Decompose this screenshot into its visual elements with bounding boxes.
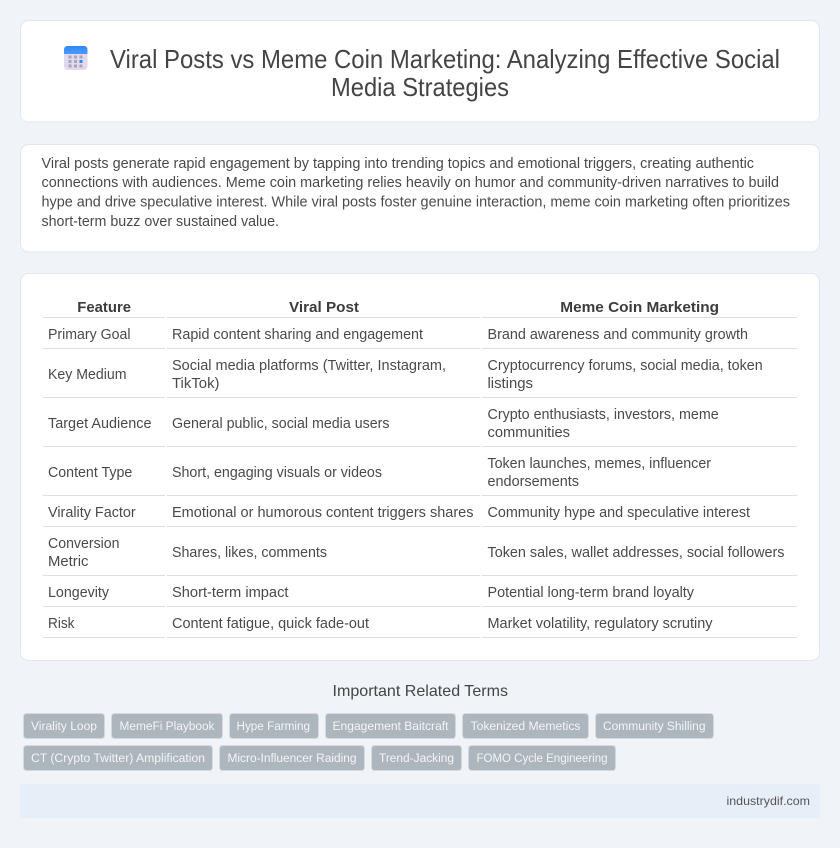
row: conversion metric: Token sales, wallet addresses, social followers: [488, 545, 784, 561]
intro text: hype and drive speculative interest. While viral posts foster genuine interaction, meme coin marketing often prioritizes: [42, 195, 790, 211]
tag: Hype Farming: Hype Farming: [236, 719, 310, 733]
row: virality factor: Emotional or humorous content triggers shares: [172, 505, 474, 521]
tag: Micro-Influencer Raiding: [220, 746, 364, 770]
panel: introduction: [20, 144, 820, 252]
table header: Viral Post: [289, 300, 359, 316]
row: virality factor: Community hype and speculative interest: [488, 505, 750, 521]
row: key medium: TikTok): [172, 376, 220, 392]
tag: CT (Crypto Twitter) Amplification: CT (Crypto Twitter) Amplification: [31, 751, 205, 765]
tag: MemeFi Playbook: MemeFi Playbook: [120, 719, 215, 733]
related term tags: [24, 714, 714, 770]
row: content type: Content Type: [48, 465, 132, 481]
intro text: [42, 156, 790, 230]
row: primary goal: Rapid content sharing and engagement: [172, 327, 423, 343]
row: conversion metric: Shares, likes, comments: [172, 545, 327, 561]
row: longevity: Potential long-term brand loyalty: [488, 585, 695, 601]
tag: Trend-Jacking: Trend-Jacking: [379, 751, 454, 765]
row: primary goal: Brand awareness and community growth: [488, 327, 748, 343]
row: primary goal: Primary Goal: [48, 327, 130, 343]
table grid lines: [43, 317, 797, 638]
table header: Meme Coin Marketing: [560, 300, 719, 316]
tag: MemeFi Playbook: [112, 714, 222, 738]
row: content type: [48, 456, 711, 490]
tag: CT (Crypto Twitter) Amplification: [24, 746, 212, 770]
row: longevity: Longevity: [48, 585, 110, 601]
tag: Virality Loop: [24, 714, 104, 738]
footer: industrydif.com: [726, 794, 810, 808]
heading: related terms: Important Related Terms: [332, 683, 508, 700]
row: content type: Short, engaging visuals or videos: [172, 465, 382, 481]
tag: Engagement Baitcraft: Engagement Baitcraft: [332, 719, 449, 733]
row: conversion metric: [48, 536, 784, 570]
tag: Micro-Influencer Raiding: Micro-Influencer Raiding: [228, 751, 356, 765]
row: key medium: [48, 358, 763, 392]
tag: Community Shilling: [596, 714, 714, 738]
table header: [77, 300, 719, 316]
row: conversion metric: Conversion: [48, 536, 120, 552]
row: longevity: [48, 585, 695, 601]
row: key medium: Key Medium: [48, 367, 127, 383]
row: virality factor: Virality Factor: [48, 505, 136, 521]
row: risk: Risk: [48, 616, 75, 632]
icon: calendar: [64, 46, 88, 70]
row: longevity: Short-term impact: [172, 585, 288, 601]
row: key medium: Social media platforms (Twitter, Instagram,: [172, 358, 446, 374]
panel: header: [20, 20, 820, 122]
tag: FOMO Cycle Engineering: FOMO Cycle Engineering: [476, 751, 608, 765]
row: risk: Content fatigue, quick fade-out: [172, 616, 369, 632]
title: [110, 44, 780, 102]
intro text: Viral posts generate rapid engagement by tapping into trending topics and emotional triggers, creating authentic: [42, 156, 754, 172]
title: Viral Posts vs Meme Coin Marketing: Analyzing Effective Social: [110, 44, 780, 74]
row: content type: endorsements: [488, 474, 579, 490]
row: target audience: General public, social media users: [172, 416, 390, 432]
row: risk: Market volatility, regulatory scrutiny: [488, 616, 713, 632]
table header: Feature: [77, 300, 131, 316]
tag: Tokenized Memetics: Tokenized Memetics: [470, 719, 580, 733]
row: virality factor: [48, 505, 750, 521]
tag: Trend-Jacking: [372, 746, 462, 770]
row: primary goal: [48, 327, 748, 343]
tag: Engagement Baitcraft: [326, 714, 456, 738]
tag: Hype Farming: [230, 714, 318, 738]
tag: Tokenized Memetics: [462, 714, 588, 738]
row: conversion metric: Metric: [48, 554, 88, 570]
footer: [20, 784, 820, 818]
row: target audience: Crypto enthusiasts, investors, meme: [488, 407, 719, 423]
row: content type: Token launches, memes, influencer: [488, 456, 711, 472]
tag: Virality Loop: Virality Loop: [31, 719, 97, 733]
row: key medium: Cryptocurrency forums, social media, token: [488, 358, 763, 374]
row: target audience: communities: [488, 425, 570, 441]
tag: FOMO Cycle Engineering: [468, 746, 616, 770]
row: risk: [48, 616, 713, 632]
row: target audience: Target Audience: [48, 416, 152, 432]
panel: comparison table: [20, 274, 820, 660]
intro text: connections with audiences. Meme coin marketing relies heavily on humor and community-driven narratives to build: [42, 175, 779, 191]
row: key medium: listings: [488, 376, 533, 392]
intro text: short-term buzz over sustained value.: [42, 214, 279, 230]
tag: Community Shilling: Community Shilling: [603, 719, 706, 733]
row: target audience: [48, 407, 719, 441]
title: Media Strategies: [331, 72, 509, 102]
